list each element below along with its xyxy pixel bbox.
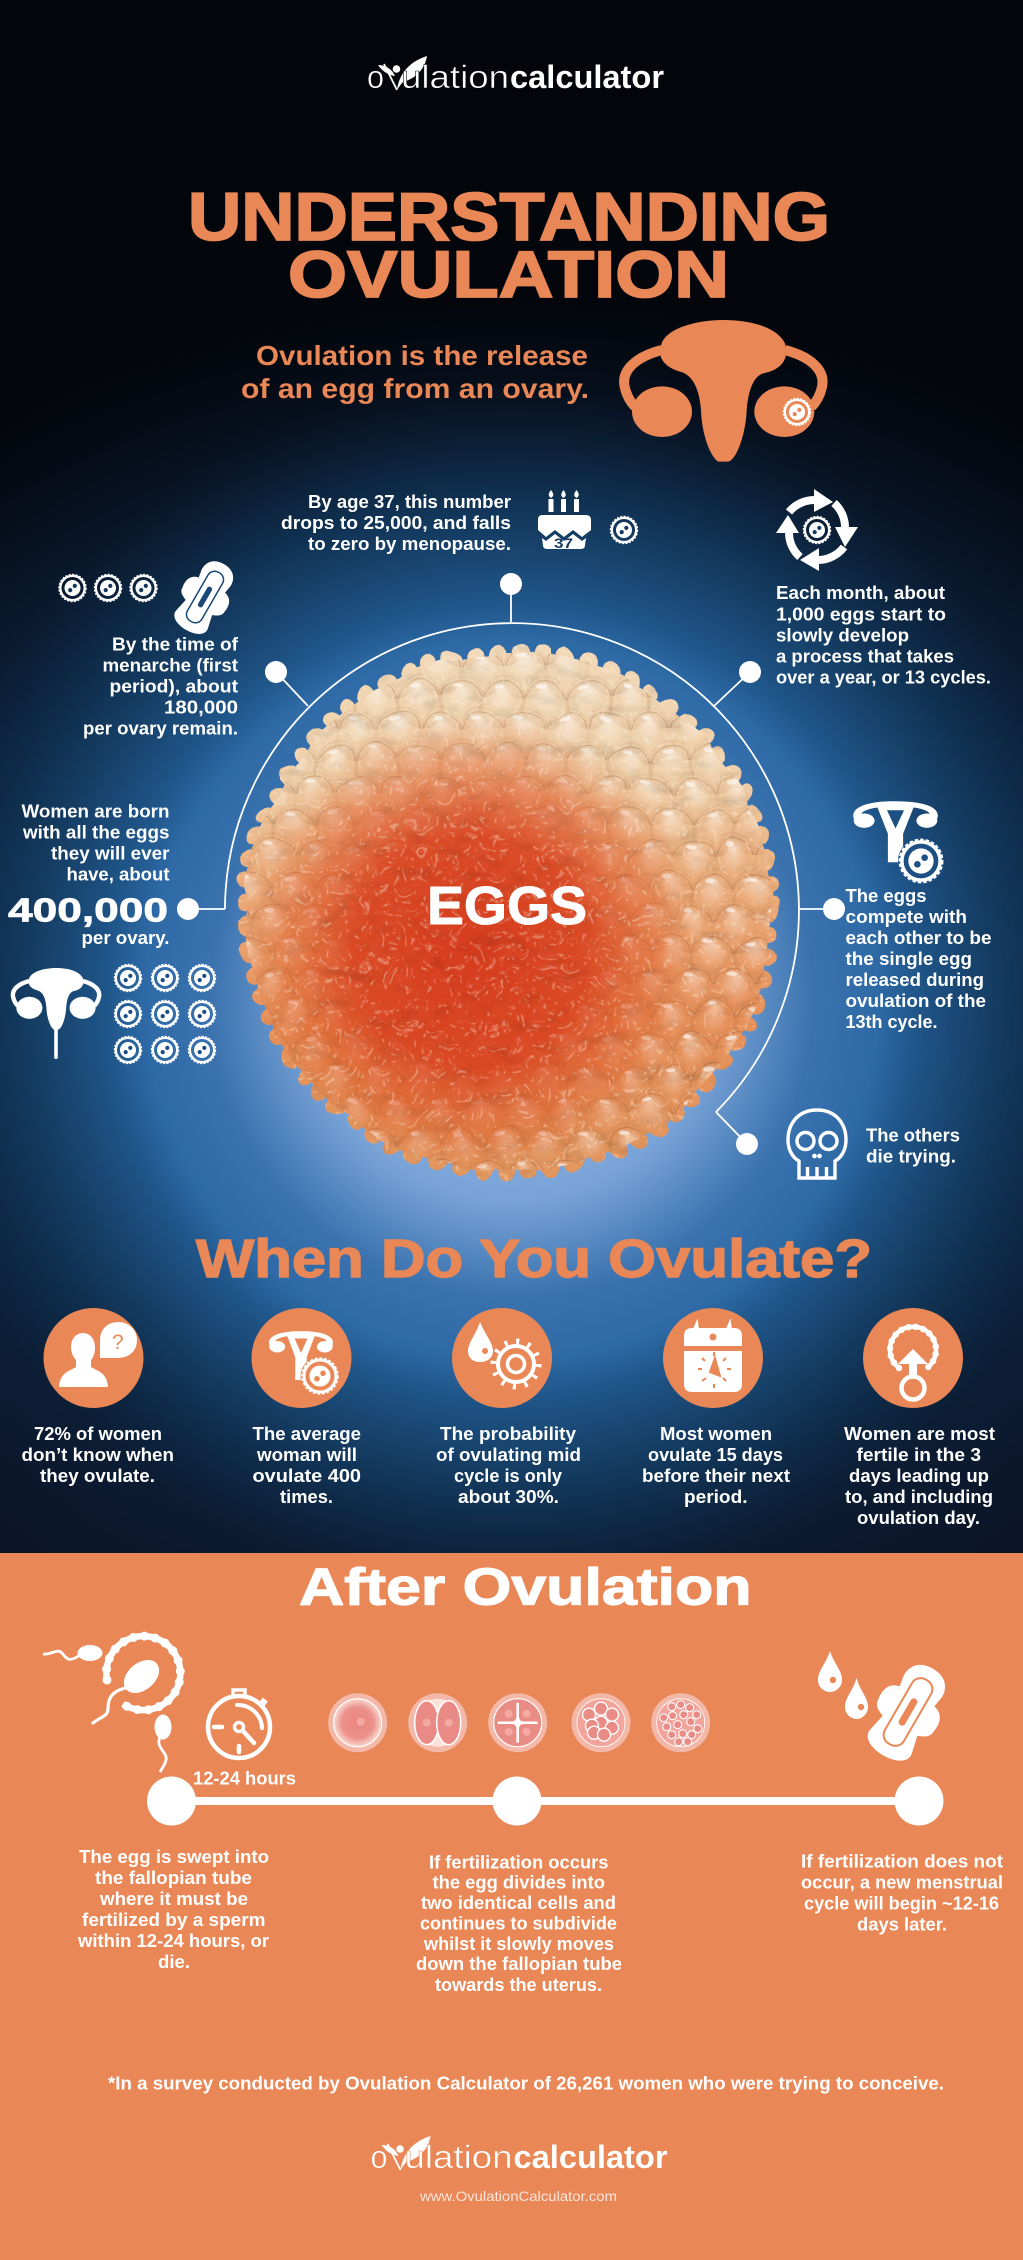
text: the others die trying: [866, 1126, 960, 1166]
label: 12-24 hours: 12-24 hours: [193, 1768, 296, 1788]
title: [188, 179, 830, 311]
fact: 72%: they ovulate.: [40, 1465, 155, 1486]
text: each month: [776, 583, 991, 688]
text: if fertilization occurs: whilst it slowly moves: [423, 1934, 614, 1954]
text: if fertilization occurs: towards the uterus.: [435, 1975, 602, 1995]
text: the eggs compete: ovulation of the: [846, 991, 986, 1011]
fact: most fertile: to, and including: [845, 1486, 993, 1507]
timeline node: new cycle: [894, 1776, 944, 1826]
icon circle: person with question: ?: [112, 1331, 124, 1354]
fact: most fertile: Women are most: [844, 1423, 995, 1444]
text: egg swept: within 12-24 hours, or: [77, 1931, 269, 1951]
logo wordmark: calculator: [514, 2139, 668, 2175]
website url: www.OvulationCalculator.com: [419, 2188, 617, 2204]
icon circle: egg with female symbol: [863, 1308, 963, 1408]
text: if fertilization does not occur: If fertilization does not: [801, 1852, 1003, 1872]
panel: after ovulation: [0, 1553, 1023, 2260]
ring dots: [177, 573, 845, 1155]
icon: uterus outline with egg: [854, 804, 944, 884]
timeline node: egg swept: [147, 1776, 196, 1826]
text: women are born: Women are born: [22, 802, 170, 822]
text: egg swept: the fallopian tube: [95, 1868, 252, 1888]
fact: 400 times: ovulate 400: [252, 1465, 361, 1486]
fact: 30 percent: [436, 1423, 581, 1507]
fact: 15 days: Most women: [660, 1423, 772, 1444]
text: the eggs compete: the single egg: [846, 949, 972, 969]
logo wordmark: calculator: [510, 59, 664, 95]
fact: 30 percent: of ovulating mid: [436, 1444, 581, 1465]
text: women are born: with all the eggs: [22, 822, 170, 842]
image: bumpy egg cell: [247, 652, 771, 1172]
icons: three eggs and pad: [59, 552, 245, 642]
subtitle: definition of ovulation: of an egg from an ovary.: [241, 373, 589, 404]
fact: most fertile: ovulation day.: [857, 1507, 980, 1528]
icon: sanitary pad: [165, 552, 245, 642]
fact: most fertile: fertile in the 3: [856, 1444, 981, 1465]
icon circle: calendar: [663, 1308, 763, 1408]
title: OVULATION: [288, 237, 729, 311]
text: the others die trying: The others: [866, 1126, 960, 1146]
text: if fertilization occurs: two identical cells and: [421, 1893, 616, 1913]
icon: orange uterus with egg: [624, 320, 823, 462]
cell: morula small: [572, 1693, 630, 1752]
icon: birthday cake 37: [538, 490, 591, 551]
fact: 72%: [22, 1423, 174, 1486]
text: women are born: [8, 802, 170, 948]
text: by the time of menarche: [83, 634, 239, 738]
text: if fertilization occurs: continues to subdivide: [420, 1914, 617, 1934]
icon: stopwatch: [208, 1690, 270, 1758]
text: women are born: have, about: [66, 864, 170, 884]
text: if fertilization occurs: [416, 1852, 622, 1995]
logo wordmark: o: [367, 59, 384, 95]
icon: egg beside cake: [610, 516, 638, 544]
text: egg swept: die.: [158, 1952, 190, 1972]
cell: morula large: [651, 1693, 710, 1752]
text: by the time of menarche: 180,000: [164, 698, 238, 718]
logo wordmark: o: [370, 2139, 388, 2175]
text: by the time of menarche: per ovary remain.: [83, 718, 238, 738]
stat: 400,000: 400,000: [8, 892, 168, 928]
fact: 30 percent: cycle is only: [454, 1465, 563, 1486]
fact: 400 times: The average: [252, 1423, 361, 1444]
timeline: [147, 1776, 944, 1826]
cell stages illustration: [328, 1693, 710, 1752]
text: the eggs compete: [846, 886, 992, 1032]
fact: 15 days: period.: [684, 1486, 748, 1507]
logo wordmark: [370, 2139, 668, 2175]
text: egg swept: The egg is swept into: [79, 1847, 269, 1867]
text: by the time of menarche: By the time of: [112, 634, 239, 654]
cell: two: [408, 1693, 467, 1752]
text: the others die trying: die trying.: [866, 1146, 956, 1166]
title: UNDERSTANDING: [188, 179, 830, 255]
text: each month: a process that takes: [776, 646, 954, 666]
text: egg swept: where it must be: [99, 1889, 248, 1909]
icon circle: uterus and egg: [252, 1308, 352, 1408]
fact: 400 times: woman will: [256, 1444, 357, 1465]
fact: 30 percent: about 30%.: [458, 1486, 559, 1507]
icon: recycling arrows around egg: [776, 489, 858, 571]
icon: white uterus: [13, 968, 99, 1059]
icon circle: drop and gear egg: [452, 1308, 552, 1408]
subtitle: definition of ovulation: Ovulation is the release: [256, 340, 588, 371]
fact: 400 times: [252, 1423, 361, 1507]
text: egg swept: fertilized by a sperm: [82, 1910, 266, 1930]
text: by the time of menarche: period), about: [110, 676, 238, 696]
fact: 15 days: ovulate 15 days: [648, 1444, 783, 1465]
text: each month: slowly develop: [776, 626, 909, 646]
text: the eggs compete: compete with: [846, 907, 967, 927]
text: women are born: per ovary.: [82, 928, 170, 948]
text: by age 37: to zero by menopause.: [308, 534, 511, 554]
logo leaf mark: [378, 56, 427, 90]
text: if fertilization does not occur: days later.: [857, 1914, 947, 1934]
fact: 400 times: times.: [280, 1486, 333, 1507]
text: the eggs compete: each other to be: [846, 928, 992, 948]
fact: 72%: don’t know when: [22, 1444, 174, 1465]
logo wordmark: ulation: [404, 2139, 512, 2175]
logo leaf mark: [382, 2136, 430, 2170]
text: if fertilization does not occur: occur, a new menstrual: [801, 1872, 1003, 1892]
text: by age 37: [281, 492, 511, 554]
ring around egg with connector lines: [188, 584, 834, 1144]
text: each month: over a year, or 13 cycles.: [776, 668, 991, 688]
fact: 15 days: before their next: [642, 1465, 790, 1486]
text: if fertilization occurs: down the fallopian tube: [416, 1954, 622, 1974]
icon: egg: [300, 1356, 340, 1396]
text: each month: Each month, about: [776, 583, 945, 603]
icon: egg on ovary: [783, 398, 811, 426]
icon: sanitary pad: [855, 1652, 961, 1772]
text columns: when do you ovulate facts: [22, 1423, 995, 1528]
text: by age 37: By age 37, this number: [308, 492, 511, 512]
text: the eggs compete: The eggs: [846, 886, 926, 906]
timeline node: fertilization: [492, 1776, 542, 1826]
cell: single: [328, 1693, 387, 1752]
logo wordmark: [367, 59, 664, 95]
text: the eggs compete: 13th cycle.: [846, 1012, 938, 1032]
text: if fertilization does not occur: [801, 1852, 1003, 1934]
heading: after ovulation: After Ovulation: [299, 1558, 752, 1616]
text: if fertilization occurs: the egg divides into: [432, 1872, 605, 1892]
fact: 15 days: [642, 1423, 790, 1507]
icon: birthday cake 37: 37: [554, 535, 573, 551]
icon: large egg: [898, 838, 944, 884]
fact: 30 percent: The probability: [440, 1423, 577, 1444]
logo wordmark: ulation: [401, 59, 509, 95]
text: by age 37: drops to 25,000, and falls: [281, 513, 511, 533]
logo: bottom: [370, 2136, 668, 2175]
fact: most fertile: [844, 1423, 995, 1528]
logo: top: [367, 56, 664, 95]
background: dark night-blue panel with glow: [0, 0, 1023, 1700]
subtitle: definition of ovulation: [241, 340, 589, 404]
icons: nine eggs grid: [114, 964, 216, 1064]
egg label: EGGS: [427, 876, 587, 936]
icon circle: person with question: [44, 1308, 144, 1408]
text: egg swept: [77, 1847, 269, 1972]
cell: four: [488, 1693, 547, 1752]
footnote: *In a survey conducted by Ovulation Calculator of 26,261 women who were trying to conceive.: [108, 2074, 944, 2094]
fact: 72%: 72% of women: [34, 1423, 162, 1444]
icon: blood drops: [818, 1651, 868, 1719]
text: the eggs compete: released during: [846, 970, 984, 990]
text: if fertilization does not occur: cycle will begin ~12-16: [804, 1894, 999, 1914]
text: by the time of menarche: menarche (first: [102, 656, 238, 676]
icon: skull: [788, 1110, 846, 1178]
fact: most fertile: days leading up: [849, 1465, 989, 1486]
heading: when do you ovulate: When Do You Ovulate?: [196, 1229, 872, 1289]
text: women are born: they will ever: [51, 844, 170, 864]
text: each month: 1,000 eggs start to: [776, 604, 946, 624]
icon: sperm and egg: [43, 1636, 180, 1772]
text: if fertilization occurs: If fertilization occurs: [429, 1852, 608, 1872]
